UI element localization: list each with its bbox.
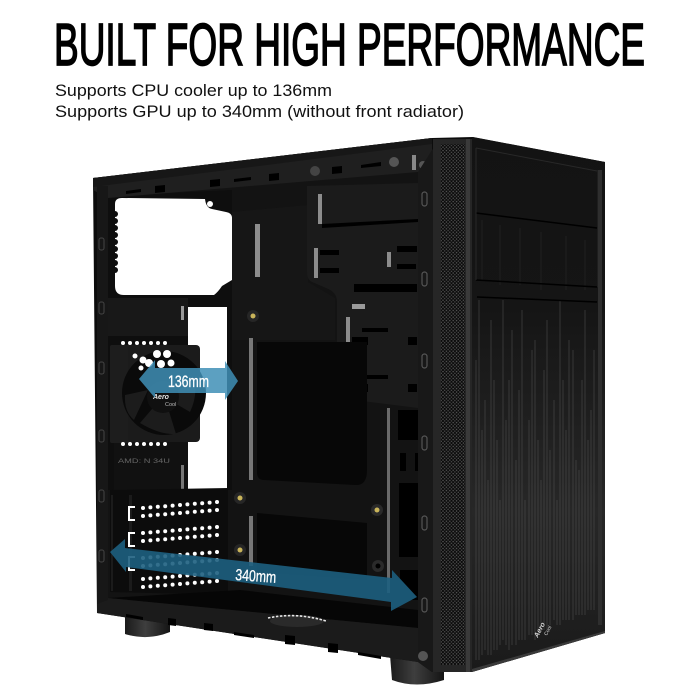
opening: notched edge teeth bbox=[112, 211, 118, 273]
icon: left foot bbox=[125, 612, 170, 637]
panel: interior motherboard tray bbox=[108, 168, 418, 650]
panel: upper tray band bbox=[232, 205, 335, 340]
panel: rear upper strip bbox=[108, 298, 188, 490]
computer case bbox=[93, 137, 605, 672]
opening: small mounting hole bbox=[207, 201, 213, 207]
text block: specifications bbox=[55, 82, 464, 121]
drive cage highlight strips bbox=[255, 194, 391, 393]
opening: power supply cutout bbox=[115, 198, 232, 295]
arrow: 136mm cooler clearance bbox=[139, 360, 238, 400]
front logo bbox=[533, 621, 554, 643]
opening: rear expansion window bbox=[188, 307, 227, 490]
front panel seams bbox=[476, 213, 597, 302]
panel: right side openings bbox=[398, 410, 418, 600]
fan blades bbox=[125, 380, 195, 434]
panel: motherboard cutouts bbox=[249, 338, 390, 593]
panel: rear section bbox=[108, 190, 232, 490]
slot ventilation dots bbox=[141, 500, 219, 589]
panel: front face bbox=[472, 137, 605, 672]
drive cage slots bbox=[320, 219, 418, 392]
label: 136mm: 136mm bbox=[168, 372, 209, 391]
panel: expansion slot brackets bbox=[110, 488, 228, 595]
icon: right foot bbox=[390, 655, 444, 684]
white fan guard dots bbox=[121, 341, 174, 446]
panel: top rail bbox=[93, 138, 432, 210]
case silhouette bbox=[93, 137, 605, 672]
panel: right frame post bbox=[418, 140, 441, 672]
slot bracket clips bbox=[129, 507, 135, 570]
fan logo: Aero bbox=[152, 394, 170, 401]
panel: left frame post bbox=[97, 186, 108, 604]
fan hub bbox=[147, 381, 179, 413]
label: 340mm: 340mm bbox=[235, 567, 277, 587]
icons: gold standoffs bbox=[234, 310, 384, 572]
panel: drive cage bbox=[255, 183, 418, 408]
text block: specifications: Supports GPU up to 340mm (without front radiator) bbox=[55, 103, 464, 121]
panel: rear upper strip: AMD: N 34U bbox=[118, 458, 170, 465]
icon: cooling fan bbox=[110, 341, 206, 446]
front logo: Cool bbox=[543, 625, 553, 637]
arrow: 340mm graphics card clearance bbox=[110, 539, 417, 611]
panel: bottom rail bbox=[97, 598, 418, 662]
icon: cooling fan: Cool bbox=[165, 402, 176, 408]
icon: floor vent bbox=[268, 615, 326, 627]
drive cage marks bbox=[352, 304, 365, 404]
brushed texture bbox=[476, 220, 594, 660]
panel: front mesh strip bbox=[433, 139, 472, 672]
bottom rail slots bbox=[126, 614, 381, 659]
text block: specifications: Supports CPU cooler up to 136mm bbox=[55, 82, 332, 100]
panel: bottom floor bbox=[108, 590, 418, 628]
front logo: Aero bbox=[533, 621, 547, 640]
